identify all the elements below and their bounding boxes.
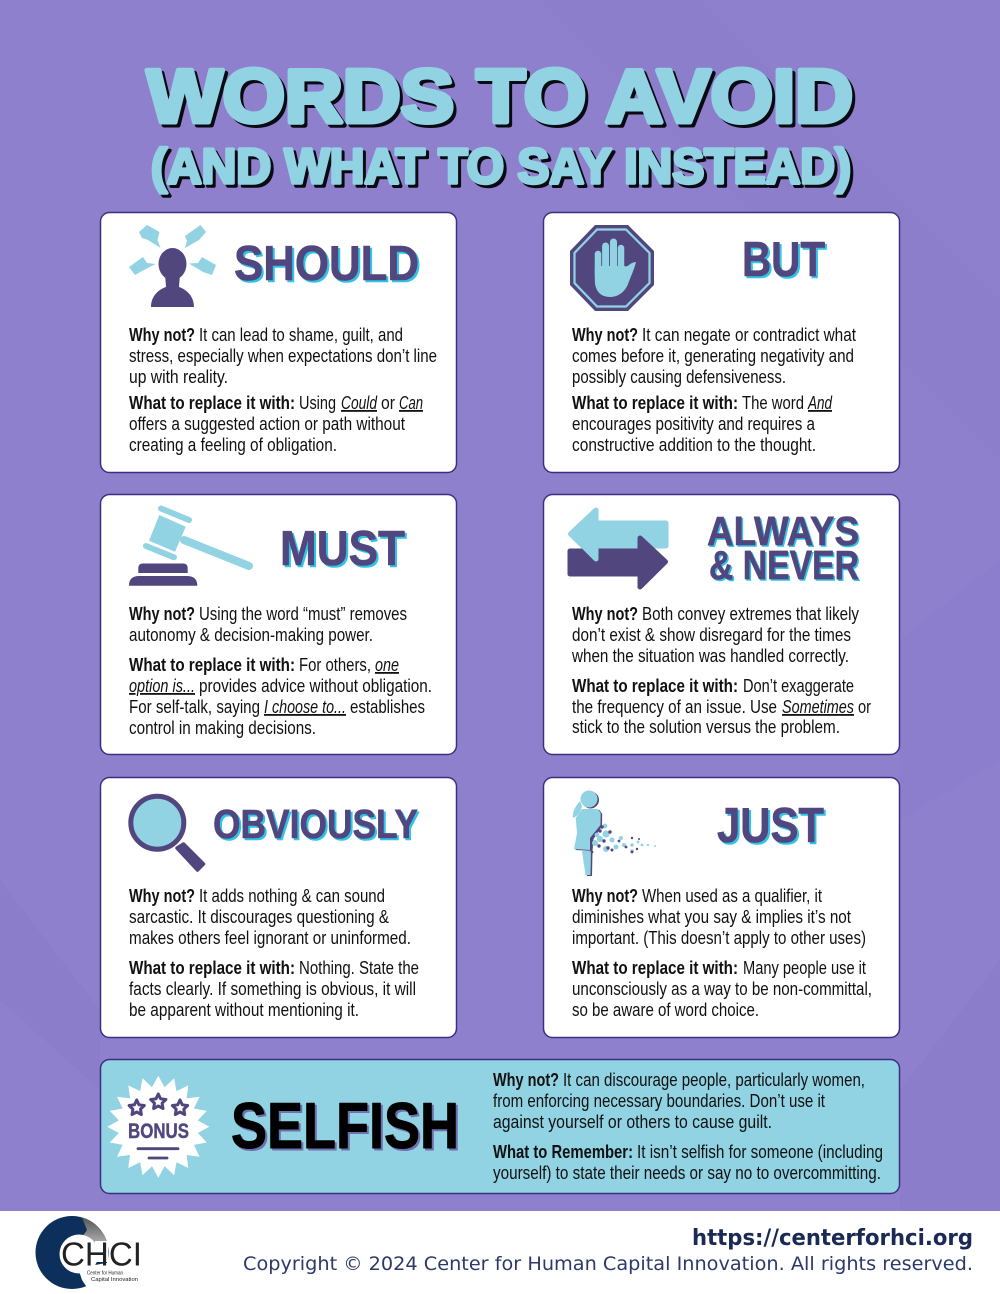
text: but replacement xyxy=(572,393,833,455)
text: should replacement: Can xyxy=(399,393,423,413)
text: should why not xyxy=(129,325,437,387)
heading: always and never: ALWAYS xyxy=(708,510,860,556)
text: but why not: It can negate or contradict what xyxy=(642,325,856,345)
text: must replacement: option is... xyxy=(129,676,195,696)
text: but replacement: What to replace it with: xyxy=(572,393,738,413)
heading: but: BUT xyxy=(742,233,825,287)
text: obviously replacement: Nothing. State the xyxy=(299,958,419,978)
heading: just: JUST xyxy=(717,799,824,853)
panel: always and never xyxy=(544,494,900,754)
text: just why not: diminishes what you say & implies it’s not xyxy=(572,907,851,927)
title xyxy=(147,54,856,197)
text: selfish what to remember: It isn’t selfish for someone (including xyxy=(637,1142,883,1162)
text: selfish what to remember: What to Remember: xyxy=(493,1142,633,1162)
text: just replacement xyxy=(572,958,872,1020)
text: selfish why not: against yourself or others to cause guilt. xyxy=(493,1112,772,1132)
text: but why not xyxy=(572,325,856,387)
text: should why not: up with reality. xyxy=(129,367,228,387)
text: must why not: Using the word “must” removes xyxy=(199,604,407,624)
text: always why not: Why not? xyxy=(572,604,638,624)
icon: dissolving person xyxy=(573,790,656,876)
text: obviously replacement: be apparent without mentioning it. xyxy=(129,1000,359,1020)
text: should replacement: What to replace it with: xyxy=(129,393,295,413)
text: just replacement: What to replace it with: xyxy=(572,958,738,978)
text: just why not: important. (This doesn’t apply to other uses) xyxy=(572,928,866,948)
text: always why not xyxy=(571,604,859,666)
text: should why not: It can lead to shame, guilt, and xyxy=(199,325,403,345)
text: must replacement: For others, xyxy=(299,655,371,675)
text: always why not: Both convey extremes that likely xyxy=(642,604,859,624)
title: WORDS TO AVOID xyxy=(147,54,853,138)
icon: gavel xyxy=(129,508,249,586)
panel: should xyxy=(100,212,456,472)
text: should replacement: creating a feeling of obligation. xyxy=(129,435,337,455)
text: must replacement: establishes xyxy=(350,697,425,717)
text: but replacement: constructive addition to the thought. xyxy=(572,435,816,455)
footer url: https://centerforhci.org xyxy=(692,1226,973,1251)
text: must why not xyxy=(129,604,407,645)
text: should replacement: Could xyxy=(341,393,378,413)
heading: should: SHOULD xyxy=(234,237,419,291)
icon: bonus badge xyxy=(107,1076,209,1178)
text: should why not: stress, especially when expectations don’t line xyxy=(129,346,437,366)
text: should replacement: offers a suggested action or path without xyxy=(129,414,405,434)
text: obviously why not: It adds nothing & can sound xyxy=(199,886,385,906)
panel: just xyxy=(544,778,900,1038)
text: but why not: Why not? xyxy=(572,325,638,345)
text: obviously replacement: facts clearly. If something is obvious, it will xyxy=(129,979,416,999)
heading: but: BUT xyxy=(744,235,827,289)
text: but replacement: The word xyxy=(742,393,804,413)
icon: bonus badge: BONUS xyxy=(128,1120,189,1143)
text: just replacement: Many people use it xyxy=(743,958,866,978)
text: should replacement xyxy=(129,393,423,455)
text: must replacement xyxy=(129,655,432,738)
heading: always and never: & NEVER xyxy=(710,544,860,590)
text: should replacement: Using xyxy=(299,393,336,413)
heading: obviously: OBVIOUSLY xyxy=(213,801,418,847)
panel: but xyxy=(544,212,900,472)
text: must replacement: I choose to... xyxy=(264,697,346,717)
footer copyright: Copyright © 2024 Center for Human Capital Innovation. All rights reserved. xyxy=(243,1253,973,1275)
text: selfish why not: It can discourage people, particularly women, xyxy=(563,1070,865,1090)
text: selfish what to remember xyxy=(493,1142,883,1183)
heading: always and never xyxy=(707,508,860,590)
heading: selfish: SELFISH xyxy=(231,1089,459,1162)
heading: always and never: & NEVER xyxy=(709,542,859,588)
text: obviously why not: sarcastic. It discourages questioning & xyxy=(129,907,389,927)
text: but why not: possibly causing defensiveness. xyxy=(572,367,786,387)
text: must replacement: one xyxy=(375,655,399,675)
text: always why not: when the situation was handled correctly. xyxy=(571,646,849,666)
heading: selfish: SELFISH xyxy=(233,1091,461,1164)
text: but replacement: And xyxy=(807,393,833,413)
text: must replacement: What to replace it with: xyxy=(129,655,295,675)
logo: CHCI: Capital Innovation xyxy=(91,1277,138,1283)
text: selfish why not: from enforcing necessary boundaries. Don’t use it xyxy=(493,1091,825,1111)
text: but why not: comes before it, generating negativity and xyxy=(572,346,854,366)
text: always replacement: stick to the solution versus the problem. xyxy=(572,717,840,737)
text: just replacement: unconsciously as a way to be non-committal, xyxy=(572,979,872,999)
text: just why not: Why not? xyxy=(572,886,638,906)
text: always replacement: What to replace it with: xyxy=(572,676,738,696)
title: (AND WHAT TO SAY INSTEAD) xyxy=(154,143,854,197)
text: must replacement: For self-talk, saying xyxy=(129,697,260,717)
title: (AND WHAT TO SAY INSTEAD) xyxy=(151,140,851,194)
text: always replacement: the frequency of an issue. Use xyxy=(572,697,777,717)
text: selfish why not: Why not? xyxy=(493,1070,559,1090)
panel: must xyxy=(100,494,456,754)
heading: must: MUST xyxy=(282,524,407,578)
text: must why not: autonomy & decision-making power. xyxy=(129,625,373,645)
text: always replacement: Sometimes xyxy=(782,697,854,717)
text: just why not: When used as a qualifier, it xyxy=(642,886,822,906)
logo: CHCI: Center for Human xyxy=(87,1270,123,1276)
text: obviously replacement xyxy=(129,958,419,1020)
icon: opposing arrows xyxy=(570,510,666,587)
logo: CHCI: CHCI xyxy=(61,1236,142,1272)
text: but replacement: encourages positivity and requires a xyxy=(572,414,816,434)
text: selfish why not xyxy=(493,1070,865,1132)
icon: stop hand xyxy=(570,225,654,311)
text: just why not xyxy=(572,886,866,948)
icon: magnifying glass xyxy=(131,796,204,870)
title: WORDS TO AVOID xyxy=(150,57,856,141)
text: should why not: Why not? xyxy=(129,325,195,345)
text: obviously replacement: What to replace it with: xyxy=(129,958,295,978)
heading: always and never: ALWAYS xyxy=(707,508,859,554)
heading: must: MUST xyxy=(280,522,405,576)
text: selfish what to remember: yourself) to state their needs or say no to overcommitting. xyxy=(493,1163,881,1183)
panel: bonus selfish xyxy=(100,1060,900,1194)
text: must why not: Why not? xyxy=(129,604,195,624)
text: must replacement: control in making decisions. xyxy=(129,718,316,738)
text: must replacement: provides advice without obligation. xyxy=(199,676,432,696)
footer xyxy=(0,1211,1000,1294)
text: obviously why not: makes others feel ignorant or uninformed. xyxy=(129,928,411,948)
text: always why not: don’t exist & show disregard for the times xyxy=(572,625,851,645)
heading: obviously: OBVIOUSLY xyxy=(215,803,420,849)
text: always replacement xyxy=(572,676,871,737)
heading: just: JUST xyxy=(719,801,826,855)
logo: CHCI xyxy=(36,1216,142,1292)
text: obviously why not: Why not? xyxy=(129,886,195,906)
panel: obviously xyxy=(100,778,456,1038)
text: obviously why not xyxy=(129,886,411,948)
text: always replacement: Don’t exaggerate xyxy=(743,676,854,696)
text: just replacement: so be aware of word choice. xyxy=(572,1000,759,1020)
text: always replacement: or xyxy=(858,697,871,717)
text: should replacement: or xyxy=(381,393,395,413)
icon: head with pointing fingers xyxy=(129,225,216,307)
heading: should: SHOULD xyxy=(236,239,421,293)
